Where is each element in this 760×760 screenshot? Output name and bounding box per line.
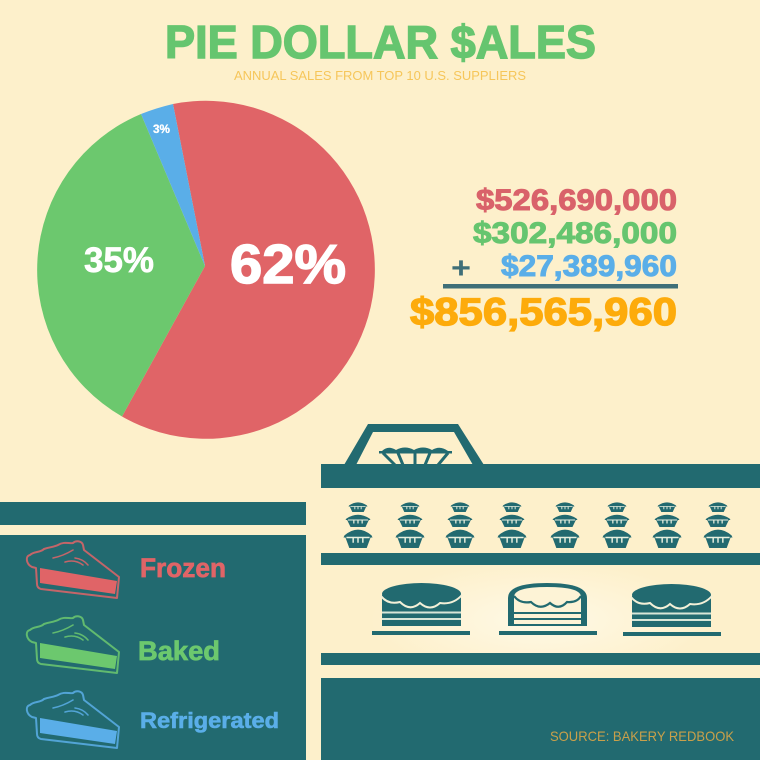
cake 3 xyxy=(623,584,721,636)
pie on top of case xyxy=(379,448,452,465)
label: baked: Baked xyxy=(138,636,220,666)
bakery case xyxy=(321,424,760,760)
subtitle: ANNUAL SALES FROM TOP 10 U.S. SUPPLIERS xyxy=(234,69,526,83)
case base xyxy=(321,678,760,760)
slice: refrigerated 3% xyxy=(141,104,205,266)
figure: frozen: $526,690,000 xyxy=(476,184,677,217)
cake 1 xyxy=(372,583,470,635)
plus sign: + xyxy=(451,252,471,285)
top bar xyxy=(321,464,760,488)
left bar xyxy=(0,502,306,525)
label: 35%: 35% xyxy=(84,241,154,280)
pie chart xyxy=(37,101,375,439)
sum rule xyxy=(443,284,678,288)
title: PIE DOLLAR $ALES xyxy=(165,16,596,68)
tart stacks xyxy=(344,502,733,548)
cake 2 xyxy=(499,583,597,635)
icon: baked pie slice xyxy=(27,616,119,673)
figure: refrigerated: $27,389,960 xyxy=(501,250,677,283)
sales figures xyxy=(410,184,678,334)
upper shelf xyxy=(321,553,760,565)
label: 62%: 62% xyxy=(230,233,346,295)
icon: refrigerated pie slice xyxy=(27,691,119,748)
icon: frozen pie slice xyxy=(27,541,119,598)
figure: baked: $302,486,000 xyxy=(473,217,677,250)
source: SOURCE: BAKERY REDBOOK xyxy=(550,728,735,744)
total: $856,565,960 xyxy=(410,291,677,334)
label: frozen: Frozen xyxy=(140,553,226,583)
lower shelf xyxy=(321,653,760,665)
shelf glow xyxy=(370,560,710,680)
slice: baked 35% xyxy=(37,114,205,416)
case handle xyxy=(344,424,484,465)
panel: legend xyxy=(0,535,306,760)
slice: frozen 62% xyxy=(122,101,375,439)
label: refrigerated: Refrigerated xyxy=(140,708,279,733)
label: 3%: 3% xyxy=(153,122,170,136)
